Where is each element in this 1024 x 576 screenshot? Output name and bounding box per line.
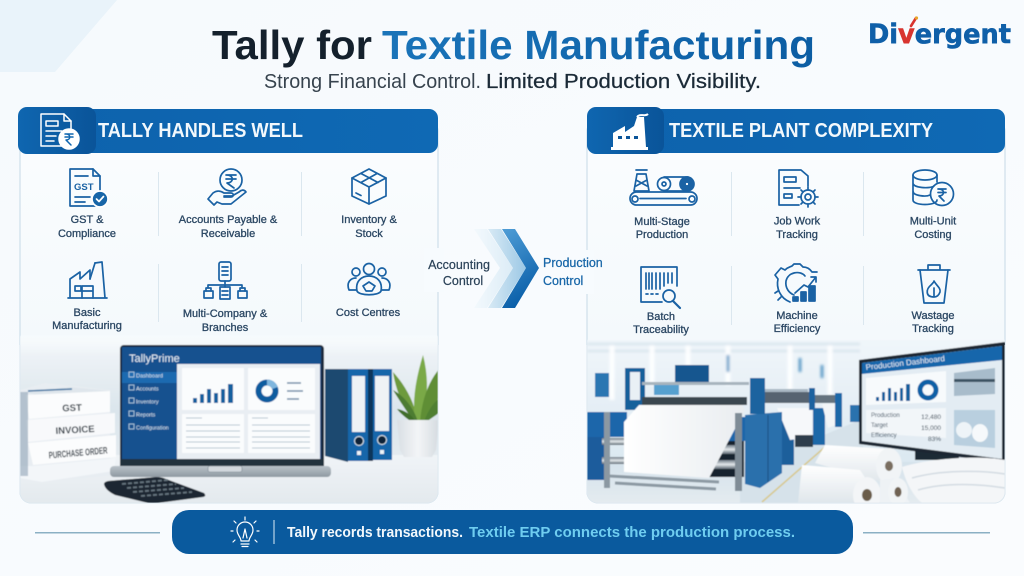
heading: TALLY HANDLES WELL bbox=[98, 120, 303, 142]
label: Receivable bbox=[201, 228, 255, 240]
paper stacks: PURCHASE ORDER bbox=[48, 445, 108, 462]
fabric rolls bbox=[798, 444, 1005, 502]
label: Branches bbox=[202, 322, 249, 334]
icon: gear with chart bbox=[775, 264, 817, 302]
title: Tally for bbox=[212, 22, 372, 68]
header icon tab bbox=[587, 107, 664, 154]
label: Stock bbox=[355, 228, 383, 240]
label: Compliance bbox=[58, 228, 116, 240]
laptop: TallyPrime bbox=[129, 353, 180, 365]
panel header bar bbox=[587, 109, 1005, 153]
dashboard monitor bbox=[859, 342, 1005, 463]
main loom frame bbox=[587, 378, 782, 491]
blue cabinet bbox=[745, 412, 782, 488]
label: Multi-Unit bbox=[910, 216, 956, 228]
arrow: accounting to production bbox=[424, 229, 539, 308]
wall backdrop bbox=[20, 338, 438, 460]
label: production control: Production bbox=[543, 256, 603, 270]
subtitle: Limited Production Visibility. bbox=[486, 70, 761, 93]
label: GST & bbox=[71, 214, 104, 226]
title bbox=[212, 22, 815, 68]
panel border overlay on photo bbox=[20, 345, 438, 503]
heading: TEXTILE PLANT COMPLEXITY bbox=[669, 120, 934, 142]
laptop: Dashboard bbox=[136, 374, 163, 380]
laptop: Accounts bbox=[136, 386, 159, 392]
decorative corner shape bbox=[0, 0, 117, 72]
item: GST and compliance bbox=[58, 169, 116, 240]
icon: hand holding rupee coin bbox=[208, 169, 246, 205]
laptop bbox=[110, 345, 331, 477]
fabric sheet bbox=[624, 405, 745, 478]
paper stacks: INVOICE bbox=[55, 424, 95, 437]
callout banner bbox=[172, 510, 853, 554]
banner message: Tally records transactions. bbox=[287, 525, 463, 541]
item: multi-unit costing bbox=[910, 170, 956, 241]
label: Machine bbox=[776, 310, 818, 322]
title: Textile Manufacturing bbox=[382, 22, 815, 68]
item: wastage tracking bbox=[911, 265, 955, 335]
panel: Tally handles well bbox=[18, 107, 440, 504]
icon: recycling bin with leaf bbox=[918, 265, 950, 303]
icon: document with gear bbox=[779, 170, 818, 207]
banner message bbox=[287, 525, 795, 541]
icon: conveyor machine bbox=[630, 170, 697, 205]
chevrons bbox=[474, 229, 539, 308]
icon: factory bbox=[611, 114, 648, 150]
dashboard monitor: Production Dashboard bbox=[865, 354, 945, 372]
right rule bbox=[863, 532, 990, 534]
icon: light bulb bbox=[231, 517, 259, 546]
potted plant bbox=[393, 355, 440, 457]
dashboard monitor: Production bbox=[871, 413, 900, 419]
overhead unit bbox=[675, 365, 709, 382]
gap in panel borders bbox=[424, 248, 444, 292]
divider bbox=[274, 520, 275, 544]
label: Accounts Payable & bbox=[179, 214, 278, 226]
header icon tab bbox=[18, 107, 96, 154]
dashboard monitor: 12,480 bbox=[921, 414, 941, 421]
laptop: Reports bbox=[136, 412, 156, 418]
label: Production bbox=[636, 229, 688, 241]
icon: coin stack with rupee bbox=[913, 170, 954, 206]
label: Job Work bbox=[774, 216, 821, 228]
label: Costing bbox=[914, 229, 952, 241]
panel header bar bbox=[19, 109, 438, 153]
dashboard monitor: 15,000 bbox=[921, 425, 941, 432]
label: Batch bbox=[647, 311, 675, 323]
label: Multi-Company & bbox=[183, 308, 268, 320]
icon: people group bbox=[348, 264, 390, 295]
laptop: Configuration bbox=[136, 426, 169, 432]
label: Basic bbox=[74, 307, 101, 319]
subtitle: Strong Financial Control. bbox=[264, 70, 481, 93]
icon: document with rupee bbox=[41, 114, 79, 149]
binders bbox=[325, 369, 392, 462]
icon: factory bbox=[68, 262, 107, 298]
laptop: Inventory bbox=[136, 400, 159, 406]
subtitle bbox=[264, 70, 761, 93]
label: Efficiency bbox=[774, 323, 821, 335]
item: batch traceability bbox=[633, 267, 689, 336]
item: basic manufacturing bbox=[52, 262, 122, 332]
label: Manufacturing bbox=[52, 320, 122, 332]
item: multi-stage production bbox=[630, 170, 697, 241]
item: job work tracking bbox=[774, 170, 821, 241]
icon: GST document: GST bbox=[74, 182, 94, 193]
dashboard monitor: 83% bbox=[928, 436, 941, 443]
label: accounting control: Accounting bbox=[428, 258, 490, 272]
panel border overlay on photo bbox=[587, 345, 1005, 503]
item: inventory and stock bbox=[341, 169, 397, 240]
label: Cost Centres bbox=[336, 307, 401, 319]
item: machine efficiency bbox=[774, 264, 821, 335]
background machines bbox=[765, 388, 859, 465]
icon: org chart bbox=[204, 262, 247, 299]
item: cost centres bbox=[336, 264, 401, 319]
divider lines bbox=[158, 172, 302, 322]
paper stacks bbox=[20, 383, 116, 482]
paper stacks: GST bbox=[62, 403, 82, 414]
panel body bbox=[587, 120, 1005, 503]
banner message: Textile ERP connects the production process. bbox=[469, 525, 795, 541]
label: Multi-Stage bbox=[634, 216, 690, 228]
item: accounts payable and receivable bbox=[179, 169, 278, 240]
panel body bbox=[20, 120, 438, 503]
dashboard monitor: Target bbox=[871, 423, 888, 429]
label: production control: Control bbox=[543, 274, 583, 288]
label: Inventory & bbox=[341, 214, 397, 226]
item: multi-company and branches bbox=[183, 262, 268, 334]
photo: textile factory with dashboard bbox=[587, 340, 1005, 513]
steel posts bbox=[604, 412, 610, 488]
divider lines bbox=[732, 172, 864, 325]
label: Wastage bbox=[911, 310, 955, 322]
icon: box bbox=[352, 169, 386, 204]
label: Tracking bbox=[776, 229, 818, 241]
dashboard monitor: Efficiency bbox=[871, 433, 897, 439]
panel: textile plant complexity bbox=[543, 107, 1005, 513]
logo: Divergent: Divergent bbox=[868, 19, 1011, 50]
label: accounting control: Control bbox=[443, 274, 483, 288]
gap behind arrow label bbox=[580, 250, 594, 294]
left rule bbox=[35, 532, 160, 534]
icon: barcode and magnifier bbox=[641, 267, 680, 308]
factory backdrop bbox=[587, 340, 1005, 465]
label: Tracking bbox=[912, 323, 954, 335]
photo: office desk with laptop bbox=[20, 336, 440, 504]
label: Traceability bbox=[633, 324, 689, 336]
calculator bbox=[104, 477, 205, 504]
